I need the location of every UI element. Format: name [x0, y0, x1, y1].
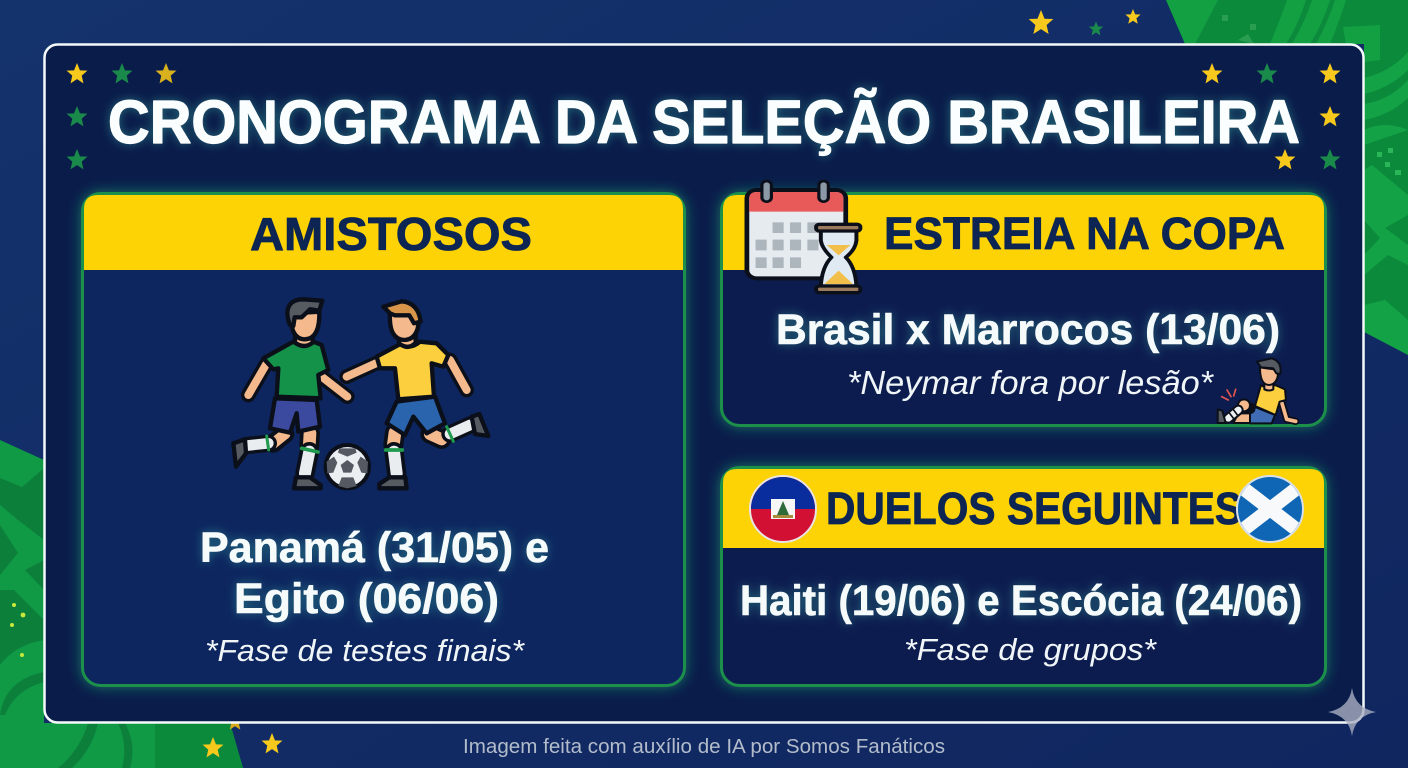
- note: *Fase de grupos*: [904, 632, 1157, 667]
- panel body: [722, 468, 1326, 686]
- football: [326, 445, 369, 488]
- panel: duelos seguintes: [722, 468, 1326, 686]
- match dates: Panamá (31/05) e: [200, 524, 549, 572]
- stars inside frame, left: [67, 63, 176, 169]
- title: CRONOGRAMA DA SELEÇÃO BRASILEIRA: [108, 88, 1300, 156]
- panel body: [722, 194, 1326, 426]
- green corner: bottom left: [0, 430, 250, 768]
- heading: AMISTOSOS: [250, 208, 532, 260]
- hourglass: [816, 224, 860, 293]
- icon: sparkle: [1328, 688, 1376, 736]
- stars inside frame, right: [1202, 63, 1340, 169]
- note: *Neymar fora por lesão*: [847, 364, 1214, 401]
- calendar: [747, 181, 846, 278]
- header band: [723, 469, 1324, 548]
- footer credit: Imagem feita com auxílio de IA por Somos Fanáticos: [463, 736, 945, 758]
- yellow player: [347, 301, 488, 488]
- header band: [84, 195, 683, 270]
- icon: two football players: [233, 299, 488, 488]
- icon: flag of Scotland: [1235, 476, 1305, 542]
- green corner: top right: [1160, 0, 1408, 360]
- green player: [233, 299, 347, 488]
- panel: amistosos: Egito (06/06): [234, 575, 499, 623]
- match dates: Haiti (19/06) e Escócia (24/06): [740, 577, 1302, 625]
- stars outside frame: [203, 9, 1141, 757]
- heading: ESTREIA NA COPA: [884, 208, 1285, 259]
- panel body: [82, 194, 684, 686]
- icon: injured player: [1218, 358, 1296, 423]
- note: *Fase de testes finais*: [205, 633, 525, 668]
- header band: [723, 195, 1324, 270]
- panel: estreia na copa: [722, 181, 1326, 426]
- panel: amistosos: [82, 194, 684, 686]
- match: Brasil x Marrocos (13/06): [776, 306, 1280, 354]
- icon: calendar and hourglass: [747, 181, 860, 293]
- heading: DUELOS SEGUINTES: [826, 483, 1242, 534]
- icon: flag of Haiti: [750, 476, 816, 542]
